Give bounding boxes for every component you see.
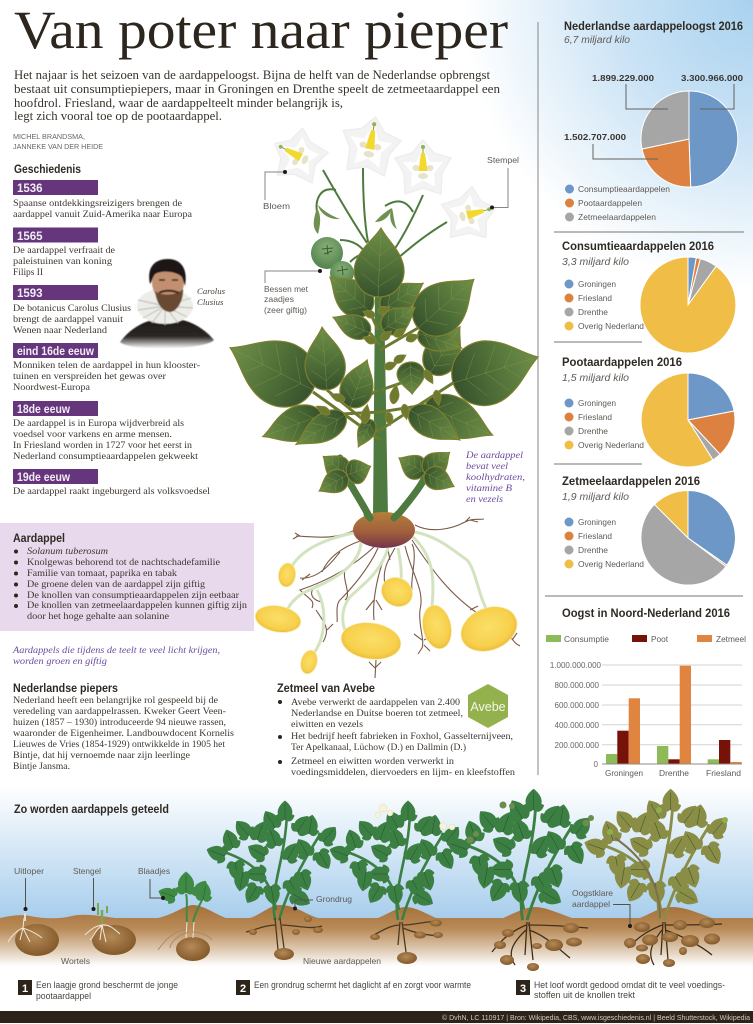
berries — [311, 237, 343, 269]
step 3 — [516, 980, 725, 1000]
pie value labels: 1.899.229.000 — [592, 73, 654, 83]
bullet list: Familie van tomaat, paprika en tabak — [27, 568, 177, 579]
bullets: Zetmeel en eiwitten worden verwerkt in — [291, 756, 454, 767]
timeline entry eind 16de eeuw: eind 16de eeuw — [17, 346, 94, 358]
subheading: 1,5 miljard kilo — [562, 373, 629, 384]
legend: Groningen — [578, 517, 616, 527]
legend: Consumptieaardappelen — [578, 184, 670, 194]
panel: Oogst in Noord-Nederland 2016: Oogst in Noord-Nederland 2016 — [562, 606, 730, 620]
heading: Zetmeel van Avebe — [277, 681, 375, 695]
legend — [564, 517, 644, 569]
panel: Aardappel — [0, 523, 254, 631]
timeline entry 1593: Wenen naar Nederland — [13, 325, 107, 336]
ground cross-section — [0, 905, 753, 970]
heading: Aardappel: Aardappel — [13, 531, 65, 545]
bar chart: 0 — [594, 760, 599, 769]
timeline entry 1593: De botanicus Carolus Clusius — [13, 303, 131, 314]
label: Bloem: Bloem — [263, 201, 290, 211]
timeline entry eind 16de eeuw: Monniken telen de aardappel in hun klooster- — [13, 360, 200, 371]
heading: Zo worden aardappels geteeld — [14, 802, 169, 816]
chart legend — [546, 634, 746, 644]
bullet list: Solanum tuberosum — [27, 546, 108, 557]
panel: Pootaardappelen 2016 — [562, 355, 735, 467]
bar chart: 1.000.000.000 — [550, 661, 602, 670]
intro text — [14, 68, 500, 123]
stage labels: Stengel — [73, 866, 101, 876]
step 1: 1 — [22, 983, 28, 995]
bullet list: De knollen van zetmeelaardappelen kunnen giftig zijn — [27, 600, 247, 611]
pie chart — [641, 490, 735, 585]
chart legend: Consumptie — [564, 634, 609, 644]
bullet list: door het hoge gehalte aan solanine — [27, 611, 169, 622]
step 2: 2 — [240, 983, 246, 995]
portrait caption: Clusius — [197, 297, 224, 307]
subheading: 1,9 miljard kilo — [562, 492, 629, 503]
stage 3: plant with berries — [443, 789, 598, 971]
callout: voedingsstoffen: bevat veel — [466, 461, 508, 472]
illustration: potato plant — [216, 112, 548, 678]
chart legend: Poot — [651, 634, 669, 644]
panel: Pootaardappelen 2016: Pootaardappelen 2016 — [562, 355, 682, 369]
pie chart — [641, 373, 735, 467]
pie value labels: 3.300.966.000 — [681, 73, 743, 83]
legend: Overig Nederland — [578, 321, 644, 331]
bar chart: 200.000.000 — [554, 741, 600, 750]
logo: Avebe — [468, 684, 508, 728]
pie chart — [640, 257, 736, 353]
stage labels: Grondrug — [316, 894, 352, 904]
panel: Nederlandse aardappeloogst 2016 — [564, 19, 743, 222]
buds — [314, 205, 397, 234]
roots — [293, 517, 520, 678]
timeline entry 18de eeuw: In Friesland worden in 1727 voor het eerst in — [13, 440, 192, 451]
panel: Zetmeelaardappelen 2016 — [562, 474, 735, 585]
heading: Geschiedenis: Geschiedenis — [14, 162, 81, 176]
callout: groen en giftig — [12, 645, 220, 667]
legend: Drenthe — [578, 545, 608, 555]
panel: Zetmeelaardappelen 2016: Zetmeelaardappelen 2016 — [562, 474, 700, 488]
label: Bloem — [263, 170, 290, 211]
lower stems — [340, 458, 370, 518]
stage labels: Wortels — [61, 956, 90, 966]
stage labels: Uitloper — [14, 866, 44, 876]
step 1: pootaardappel — [36, 991, 91, 1001]
byline: MICHEL BRANDSMA, — [13, 132, 85, 141]
timeline entry 18de eeuw — [13, 401, 198, 462]
portrait caption: Carolus — [197, 286, 226, 296]
timeline entry 1536 — [13, 180, 193, 220]
stage 1: seedlings — [8, 871, 216, 961]
bar chart: 800.000.000 — [554, 681, 600, 690]
bar chart: 600.000.000 — [554, 701, 600, 710]
legend: Zetmeelaardappelen — [578, 212, 656, 222]
text block: Nederlandse piepers: huizen (1857 – 1930) introduceerde 94 nieuwe rassen, — [13, 717, 226, 728]
callout: groen en giftig: Aardappels die tijdens de teelt te veel licht krijgen, — [12, 645, 220, 656]
legend: Friesland — [578, 412, 612, 422]
legend — [565, 184, 670, 222]
subheading: 6,7 miljard kilo — [564, 35, 630, 46]
step 1: Een laagje grond beschermt de jonge — [36, 980, 178, 990]
timeline entry 1536: Spaanse ontdekkingsreizigers brengen de — [13, 198, 182, 209]
legend: Groningen — [578, 279, 616, 289]
new potatoes — [253, 562, 524, 676]
text block: Nederlandse piepers: Nederland heeft een belangrijke rol gespeeld bij de — [13, 695, 218, 706]
bar chart: Friesland — [706, 768, 741, 778]
timeline entry 1536: aardappel vanuit Zuid-Amerika naar Europa — [13, 209, 193, 220]
label: Bessen met zaadjes: (zeer giftig) — [264, 305, 307, 315]
timeline entry eind 16de eeuw: Noordwest-Europa — [13, 382, 91, 393]
small leaflets — [314, 304, 443, 426]
chart legend: Zetmeel — [716, 634, 746, 644]
legend — [564, 279, 644, 331]
timeline entry 19de eeuw: 19de eeuw — [17, 472, 70, 484]
mother tuber — [353, 512, 415, 548]
legend: Groningen — [578, 398, 616, 408]
panel: Zetmeel van Avebe — [277, 681, 515, 778]
timeline entry 1565 — [13, 228, 115, 278]
callout: voedingsstoffen: vitamine B — [466, 483, 512, 494]
timeline entry 19de eeuw: De aardappel raakt ingeburgerd als volksvoedsel — [13, 486, 210, 497]
timeline entry 1565: 1565 — [17, 231, 43, 243]
timeline entry 1593: brengt de aardappel vanuit — [13, 314, 123, 325]
stage labels: aardappel — [572, 899, 610, 909]
bullet list: Knolgewas behorend tot de nachtschadefamilie — [27, 557, 220, 568]
text block: Nederlandse piepers: Nederlandse piepers — [13, 681, 118, 695]
panel: Nederlandse aardappeloogst 2016: Nederlandse aardappeloogst 2016 — [564, 19, 743, 33]
panel: Zo worden aardappels geteeld — [0, 789, 753, 1001]
pie value labels: 1.502.707.000 — [564, 132, 626, 142]
legend: Overig Nederland — [578, 440, 644, 450]
callout: voedingsstoffen: en vezels — [466, 494, 503, 505]
stolons — [288, 532, 488, 654]
stage labels: Nieuwe aardappelen — [303, 956, 381, 966]
panel: Consumtieaardappelen 2016 — [562, 239, 736, 353]
flower stems — [317, 168, 447, 262]
byline — [13, 132, 103, 151]
bar chart: Groningen — [605, 768, 643, 778]
timeline entry 19de eeuw — [13, 469, 210, 497]
bullets: Avebe verwerkt de aardappelen van 2.400 — [291, 697, 460, 708]
bullet list — [14, 546, 247, 622]
label: Bessen met zaadjes — [264, 269, 322, 315]
divider: right rail — [537, 22, 539, 775]
label: Stempel: Stempel — [487, 155, 519, 165]
stage 2: plant in bloom — [326, 800, 467, 964]
timeline entry 18de eeuw: voedsel voor varkens en arme mensen. — [13, 429, 172, 440]
timeline entry eind 16de eeuw — [13, 343, 200, 393]
panel: Consumtieaardappelen 2016: Consumtieaardappelen 2016 — [562, 239, 714, 253]
text block: Nederlandse piepers: Bintje, dat hij vernoemde naar zijn leerlinge — [13, 750, 190, 761]
bullets: voedingsmiddelen, diervoeders en lijm- en kleefstoffen — [291, 767, 515, 778]
bar chart: Drenthe — [659, 768, 689, 778]
lower leaf clusters — [314, 443, 459, 501]
text block: Nederlandse piepers: waaronder de Eigenheimer. Landbouwdocent Kornelis — [13, 728, 234, 739]
timeline entry eind 16de eeuw: tuinen en verspreiden het gewas over — [13, 371, 167, 382]
timeline entry 18de eeuw: Nederland consumptieaardappelen gekweekt — [13, 451, 198, 462]
panel: Geschiedenis timeline — [13, 162, 210, 497]
intro text: legt zich vooral toe op de pootaardappel. — [14, 109, 222, 123]
main stem and branches — [373, 295, 388, 516]
label: Bessen met zaadjes: zaadjes — [264, 294, 294, 304]
legend: Drenthe — [578, 426, 608, 436]
intro text: hoofdrol. Friesland, waar de aardappelteelt minder belangrijk is, — [14, 96, 343, 110]
stage labels — [14, 866, 632, 966]
step 2 — [236, 980, 471, 995]
timeline entry 1536: 1536 — [17, 183, 43, 195]
timeline entry 1593 — [13, 285, 131, 336]
legend: Friesland — [578, 531, 612, 541]
stem ends on tuber — [367, 514, 398, 518]
timeline entry 18de eeuw: De aardappel is in Europa wijdverbreid als — [13, 418, 184, 429]
callout: voedingsstoffen: De aardappel — [465, 450, 523, 461]
stage labels: Oogstklare — [572, 888, 613, 898]
text block: Nederlandse piepers: veredeling van aardappelrassen. Kweker Geert Veen- — [13, 706, 226, 717]
step 3: stoffen uit de knollen trekt — [534, 990, 635, 1000]
bullets: Ter Apelkanaal, Lüchow (D.) en Dallmin (D.) — [291, 742, 466, 753]
bar chart: 400.000.000 — [554, 721, 600, 730]
label: Stempel — [487, 155, 519, 210]
flowers — [262, 120, 333, 191]
legend: Friesland — [578, 293, 612, 303]
step 1 — [18, 980, 178, 1001]
timeline entry 1593: 1593 — [17, 288, 43, 300]
bullets: Het bedrijf heeft fabrieken in Foxhol, Gasselternijveen, — [291, 731, 513, 742]
footer credits — [0, 1011, 753, 1023]
stage 3: dying plant, ready to harvest — [580, 789, 735, 967]
panel: Oogst in Noord-Nederland 2016 — [546, 606, 746, 778]
stage labels: Blaadjes — [138, 866, 170, 876]
title: Van poter naar pieper — [14, 0, 508, 60]
legend — [564, 398, 644, 450]
stage 2: plant with grondrug — [203, 800, 344, 960]
bullets — [278, 697, 515, 778]
leaves — [216, 227, 548, 456]
label: Bessen met zaadjes: Bessen met — [264, 284, 309, 294]
bullets: Nederlandse en Duitse boeren tot zetmeel, — [291, 708, 463, 719]
subheading: 3,3 miljard kilo — [562, 257, 629, 268]
timeline entry 1565: De aardappel verfraait de — [13, 245, 115, 256]
legend: Drenthe — [578, 307, 608, 317]
step 3: Het loof wordt gedood omdat dit te veel voedings- — [534, 980, 725, 990]
legend: Overig Nederland — [578, 559, 644, 569]
step 2: Een grondrug schermt het daglicht af en zorgt voor warmte — [254, 980, 471, 990]
bullet list: De knollen van consumptieaardappelen zijn eetbaar — [27, 590, 240, 601]
callout: groen en giftig: worden groen en giftig — [13, 656, 107, 667]
timeline entry 1565: Filips II — [13, 267, 43, 278]
logo: Avebe: Avebe — [470, 700, 506, 714]
timeline entry 1565: paleistuinen van koning — [13, 256, 112, 267]
bullets: eiwitten en vezels — [291, 719, 363, 730]
text block: Nederlandse piepers: Lieuwes de Vries (1854-1929) ontwikkelde in 1905 het — [13, 739, 225, 750]
portrait: Carolus Clusius — [120, 259, 214, 349]
callout: voedingsstoffen — [465, 450, 525, 505]
timeline entry 18de eeuw: 18de eeuw — [17, 404, 70, 416]
pie value labels — [564, 73, 743, 159]
pie chart — [641, 91, 738, 187]
callout: voedingsstoffen: koolhydraten, — [466, 472, 525, 483]
step 3: 3 — [520, 983, 526, 995]
intro text: Het najaar is het seizoen van de aardappeloogst. Bijna de helft van de Nederlandse opbrengst — [14, 68, 491, 82]
text block: Nederlandse piepers — [13, 681, 234, 772]
bullet list: De groene delen van de aardappel zijn giftig — [27, 579, 205, 590]
portrait caption — [197, 286, 226, 307]
bar chart — [550, 661, 742, 778]
byline: JANNEKE VAN DER HEIDE — [13, 142, 103, 151]
intro text: bestaat uit consumptiepiepers, maar in Groningen en Drenthe speelt de zetmeetaardappel een — [14, 82, 500, 96]
text block: Nederlandse piepers: Bintje Jansma. — [13, 761, 70, 772]
legend: Pootaardappelen — [578, 198, 642, 208]
